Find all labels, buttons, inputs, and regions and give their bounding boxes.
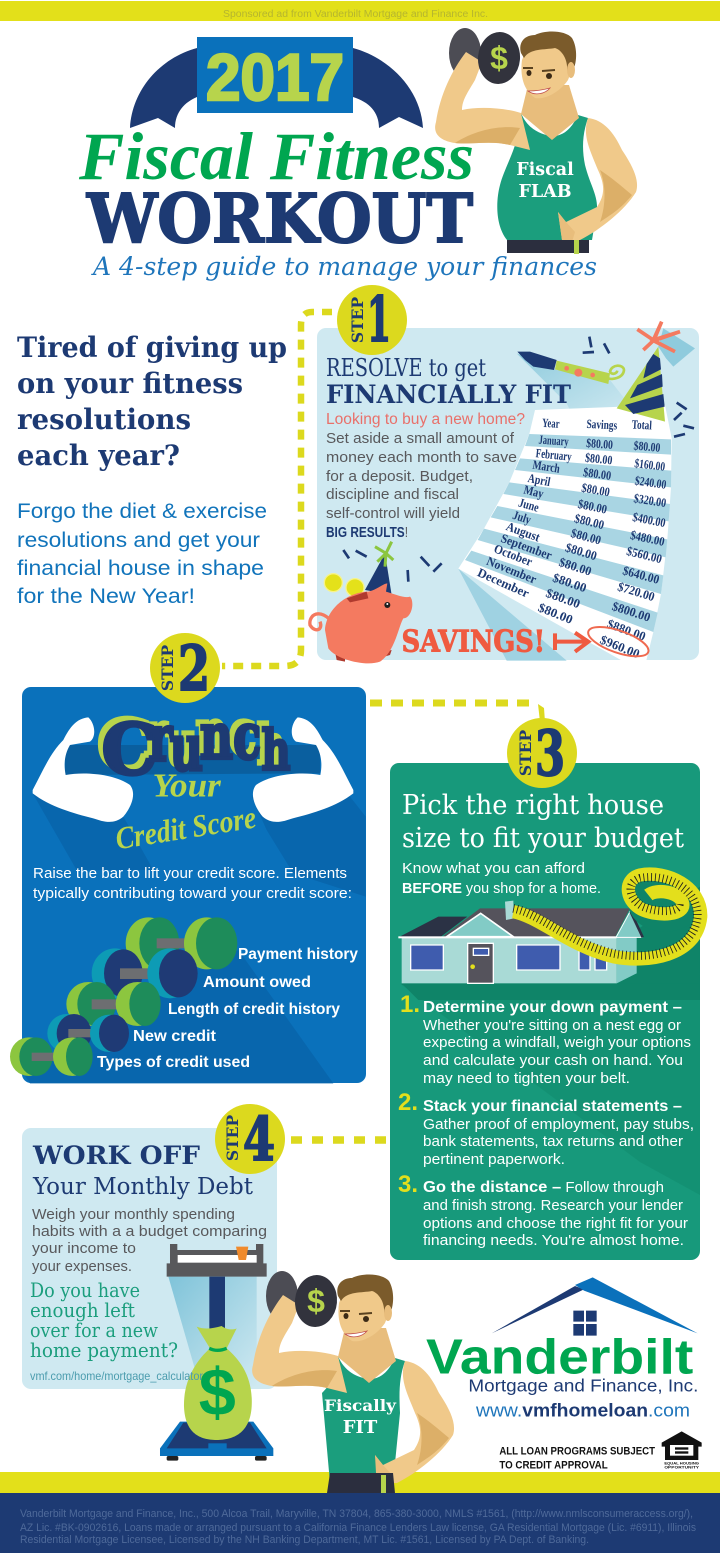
table rows: March — [532, 458, 561, 476]
table rows: $640.00 — [621, 564, 661, 587]
Crunch lettering: n — [195, 695, 228, 770]
heading: Pick the right house — [402, 790, 664, 821]
step 1 badge: 1 — [367, 283, 391, 356]
Crunch lettering: c — [233, 700, 261, 774]
Crunch lettering: C — [102, 708, 157, 791]
table rows: October — [492, 542, 535, 569]
party art and table (3x local coords) — [310, 322, 695, 673]
table rows: September — [499, 531, 554, 563]
table rows: June — [517, 496, 541, 515]
step item 1: expecting a windfall, weigh your options — [423, 1035, 691, 1051]
tagline: Mortgage and Finance, Inc. — [468, 1376, 698, 1396]
green question — [30, 1278, 178, 1362]
step 4 badge: 4 — [243, 1105, 275, 1175]
intro copy — [33, 865, 352, 902]
table rows: May — [522, 483, 546, 501]
long shadows — [33, 793, 366, 897]
table rows: $80.00 — [544, 586, 582, 611]
heading — [326, 354, 571, 409]
step item 1 — [400, 991, 691, 1087]
table rows: July — [511, 508, 533, 527]
table rows: $80.00 — [569, 526, 603, 548]
panel: step 3 — [390, 717, 702, 1260]
table rows: $80.00 — [586, 436, 613, 452]
green question: over for a new — [30, 1318, 158, 1342]
panel: step 4 — [22, 1128, 277, 1389]
step item 3: financing needs. You're almost home. — [423, 1233, 684, 1249]
dashed path step 1 to 2 — [222, 312, 332, 666]
subtitle: A 4-step guide to manage your finances — [91, 252, 597, 281]
table rows: April — [527, 471, 552, 489]
step item 3: 3. — [398, 1171, 418, 1198]
table rows: Total — [632, 417, 653, 433]
step item 3 — [398, 1171, 688, 1249]
weighing scale with money bag — [160, 1244, 273, 1461]
hat shadow — [658, 328, 695, 367]
step 2 badge: STEP — [158, 645, 177, 691]
Crunch lettering: h — [262, 719, 290, 783]
footer band: Vanderbilt Mortgage and Finance, Inc., 500 Alcoa Trail, Maryville, TN 37804, 865-380-3000, NMLS #1561, (http://www.nmlsconsumeraccess.org/), — [20, 1508, 693, 1520]
step 2 badge: 2 — [178, 632, 210, 705]
table rows: $400.00 — [631, 510, 667, 530]
step 3 badge: STEP — [516, 730, 535, 776]
table rows: $880.00 — [605, 617, 648, 644]
spreadsheet sheet — [458, 405, 672, 673]
step 4 badge: STEP — [223, 1115, 242, 1161]
step item 2: pertinent paperwork. — [423, 1152, 565, 1168]
intro body: Forgo the diet & exercise — [17, 500, 267, 523]
Credit Score: Credit Score — [113, 800, 258, 856]
intro copy: Raise the bar to lift your credit score. Elements — [33, 865, 347, 882]
body text — [32, 1206, 267, 1275]
intro heading: resolutions — [17, 403, 191, 436]
body text: discipline and fiscal — [326, 486, 459, 503]
crunch art (3x local coords) — [10, 695, 366, 1083]
step item 3: options and choose the right fit for your — [423, 1216, 688, 1232]
credit score factor labels: New credit — [133, 1028, 217, 1045]
dumbbell stack — [10, 917, 333, 1083]
disclaimer: TO CREDIT APPROVAL — [499, 1459, 608, 1471]
party horn — [517, 352, 624, 384]
heading — [402, 790, 684, 854]
body text: your income to — [32, 1240, 136, 1257]
circle around total — [585, 621, 652, 662]
heading: Your Monthly Debt — [32, 1174, 254, 1200]
table rows: August — [504, 519, 543, 545]
horn shadow — [517, 353, 633, 417]
footer band: Residential Mortgage Licensee, Licensed by the NH Banking Department, MT Lic. #1561, Licensed by PA Dept. of Banking. — [20, 1534, 589, 1546]
body text: self-control will yield — [326, 505, 460, 522]
step item 3: Go the distance – Follow through — [423, 1179, 664, 1196]
step 4 badge — [215, 1104, 285, 1175]
website: www.vmfhomeloan.com — [475, 1400, 690, 1421]
body text: habits with a a budget comparing — [32, 1223, 267, 1240]
footer band — [0, 1493, 720, 1553]
intro heading: each year? — [17, 439, 180, 472]
step 2 badge — [150, 632, 220, 705]
body text: Set aside a small amount of — [326, 430, 515, 447]
roof — [492, 1277, 698, 1333]
Your: Your — [152, 768, 222, 805]
red question: Looking to buy a new home? — [326, 411, 525, 428]
panel: step 1 — [310, 283, 699, 673]
table rows: $80.00 — [536, 600, 575, 627]
table shadow — [458, 569, 567, 661]
table rows: $80.00 — [573, 511, 606, 532]
step item 1: may need to tighten your belt. — [423, 1071, 630, 1087]
step item 2: Gather proof of employment, pay stubs, — [423, 1117, 694, 1133]
heading — [32, 1141, 254, 1200]
credit score factor labels: Types of credit used — [97, 1054, 250, 1071]
calculator link: vmf.com/home/mortgage_calculator — [30, 1369, 203, 1383]
measuring tape — [505, 874, 702, 959]
logo: Vanderbilt — [426, 1277, 702, 1471]
body text: for a deposit. Budget, — [326, 468, 473, 485]
table rows: $80.00 — [633, 439, 661, 455]
step 1 badge — [337, 283, 407, 356]
table rows: $240.00 — [634, 474, 667, 492]
green question: enough left — [30, 1298, 135, 1322]
equal housing icon — [662, 1431, 702, 1469]
credit score factor labels: Amount owed — [203, 974, 311, 991]
intro body: financial house in shape — [17, 557, 264, 580]
confetti dashes — [343, 337, 694, 582]
table rows: $160.00 — [634, 456, 666, 474]
table rows: $80.00 — [557, 555, 593, 579]
Crunch lettering: h — [257, 714, 286, 778]
step 1 badge: STEP — [348, 297, 367, 343]
numbered steps — [398, 991, 694, 1249]
intro body — [17, 500, 267, 608]
table rows: $560.00 — [625, 544, 663, 566]
piggy bank — [310, 542, 412, 663]
step 3 badge: 3 — [535, 717, 565, 790]
equal housing icon: OPPORTUNITY — [664, 1465, 700, 1469]
table rows: $720.00 — [616, 580, 656, 604]
savings arrow — [555, 633, 588, 652]
weighing scale with money bag: $ — [199, 1356, 236, 1430]
heading: WORK OFF — [32, 1141, 200, 1170]
Crunch lettering — [97, 695, 290, 791]
bottom yellow band — [0, 1472, 720, 1493]
table rows: $320.00 — [633, 491, 667, 510]
table rows — [475, 416, 667, 661]
intro body: for the New Year! — [17, 585, 195, 608]
table rows: $80.00 — [564, 540, 599, 563]
step item 1: 1. — [400, 991, 420, 1018]
table rows: $80.00 — [551, 571, 588, 595]
man: Fiscal Flab: Fiscal — [516, 160, 574, 180]
subheading — [402, 860, 601, 897]
Crunch lettering: r — [148, 702, 173, 777]
table rows: December — [475, 565, 532, 601]
top sponsor bar — [0, 1, 720, 21]
body text: BIG RESULTS! — [326, 524, 408, 541]
title: WORKOUT: WORKOUT — [86, 179, 473, 258]
green question: Do you have — [30, 1278, 140, 1302]
man: Fiscal Flab: FLAB — [518, 182, 572, 202]
intro body: resolutions and get your — [17, 529, 260, 552]
disclaimer — [499, 1445, 655, 1471]
panel: step 2 — [10, 632, 366, 1083]
footer band: AZ Lic. #BK-0902616, Loans made or arranged pursuant to a California Finance Lenders Law license, GA Residential Mortgage (Lic. #6911), Illinois — [20, 1522, 696, 1534]
table rows: November — [484, 554, 539, 587]
credit score factor labels: Length of credit history — [168, 1001, 340, 1018]
step item 1: Whether you're sitting on a nest egg or — [423, 1018, 681, 1034]
man: Fiscal Flab — [435, 28, 637, 254]
table rows: $960.00 — [598, 633, 642, 661]
table rows: February — [535, 446, 573, 464]
house — [398, 908, 643, 983]
man: Fiscally Fit: FIT — [343, 1417, 378, 1438]
connector tag step 3 — [538, 704, 545, 722]
subheading: Know what you can afford — [402, 860, 585, 877]
savings label: SAVINGS! — [402, 625, 545, 660]
intro heading — [17, 331, 287, 472]
2017 badge: 2017 — [206, 40, 344, 114]
table rows: $80.00 — [577, 497, 608, 517]
house shadow — [402, 985, 700, 1195]
table rows: January — [538, 433, 570, 449]
flexed arms — [33, 717, 133, 822]
body text: money each month to save — [326, 449, 517, 466]
heading: FINANCIALLY FIT — [326, 380, 571, 409]
Crunch lettering: c — [228, 695, 256, 770]
Crunch lettering: C — [97, 703, 152, 786]
Crunch lettering: u — [165, 706, 198, 781]
table rows: $80.00 — [582, 465, 612, 483]
dashed path step 4 to 3 — [291, 1136, 388, 1144]
body text: Weigh your monthly spending — [32, 1206, 235, 1223]
man: Fiscally Fit: Fiscally — [324, 1396, 397, 1415]
step item 2 — [398, 1089, 694, 1168]
window — [573, 1311, 597, 1336]
table rows: $80.00 — [584, 451, 613, 467]
intro heading: Tired of giving up — [17, 331, 287, 364]
step item 2: Stack your financial statements – — [423, 1098, 682, 1115]
heading: RESOLVE to get — [326, 354, 486, 382]
Crunch lettering: n — [200, 700, 233, 774]
step item 2: 2. — [398, 1089, 418, 1116]
dashed path step 2 to 3 — [370, 700, 530, 706]
equal housing icon: EQUAL HOUSING — [664, 1461, 700, 1465]
intro heading: on your fitness — [17, 367, 243, 400]
step item 3: and finish strong. Research your lender — [423, 1198, 683, 1214]
party hat — [617, 322, 680, 422]
step item 1: and calculate your cash on hand. You — [423, 1053, 683, 1069]
house and tape (3x local coords) — [398, 874, 702, 1000]
green question: home payment? — [30, 1338, 178, 1362]
title: Fiscal Fitness: Fiscal Fitness — [78, 118, 474, 194]
table rows: $800.00 — [610, 599, 652, 625]
heading: size to fit your budget — [402, 823, 684, 854]
man: Fiscally Fit — [252, 1271, 454, 1493]
credit score factor labels: Payment history — [238, 946, 358, 963]
ribbon arch — [130, 48, 423, 128]
intro copy: typically contributing toward your credit score: — [33, 885, 352, 902]
table rows: Year — [542, 416, 560, 431]
disclaimer: ALL LOAN PROGRAMS SUBJECT — [499, 1445, 655, 1457]
wordmark: Vanderbilt — [426, 1329, 693, 1384]
table rows: $480.00 — [629, 528, 666, 549]
top sponsor bar: Sponsored ad from Vanderbilt Mortgage and Finance Inc. — [223, 9, 488, 20]
credit score factor labels — [97, 946, 358, 1071]
step item 1: Determine your down payment – — [423, 999, 682, 1016]
table rows: $80.00 — [581, 481, 611, 499]
subheading: BEFORE you shop for a home. — [402, 880, 601, 897]
table rows: Savings — [586, 417, 618, 432]
Crunch lettering: u — [170, 711, 203, 786]
step 3 badge — [507, 717, 577, 790]
Crunch lettering: r — [144, 697, 168, 772]
step item 2: bank statements, tax returns and other — [423, 1134, 683, 1150]
body text — [326, 430, 517, 541]
body text: your expenses. — [32, 1258, 132, 1275]
